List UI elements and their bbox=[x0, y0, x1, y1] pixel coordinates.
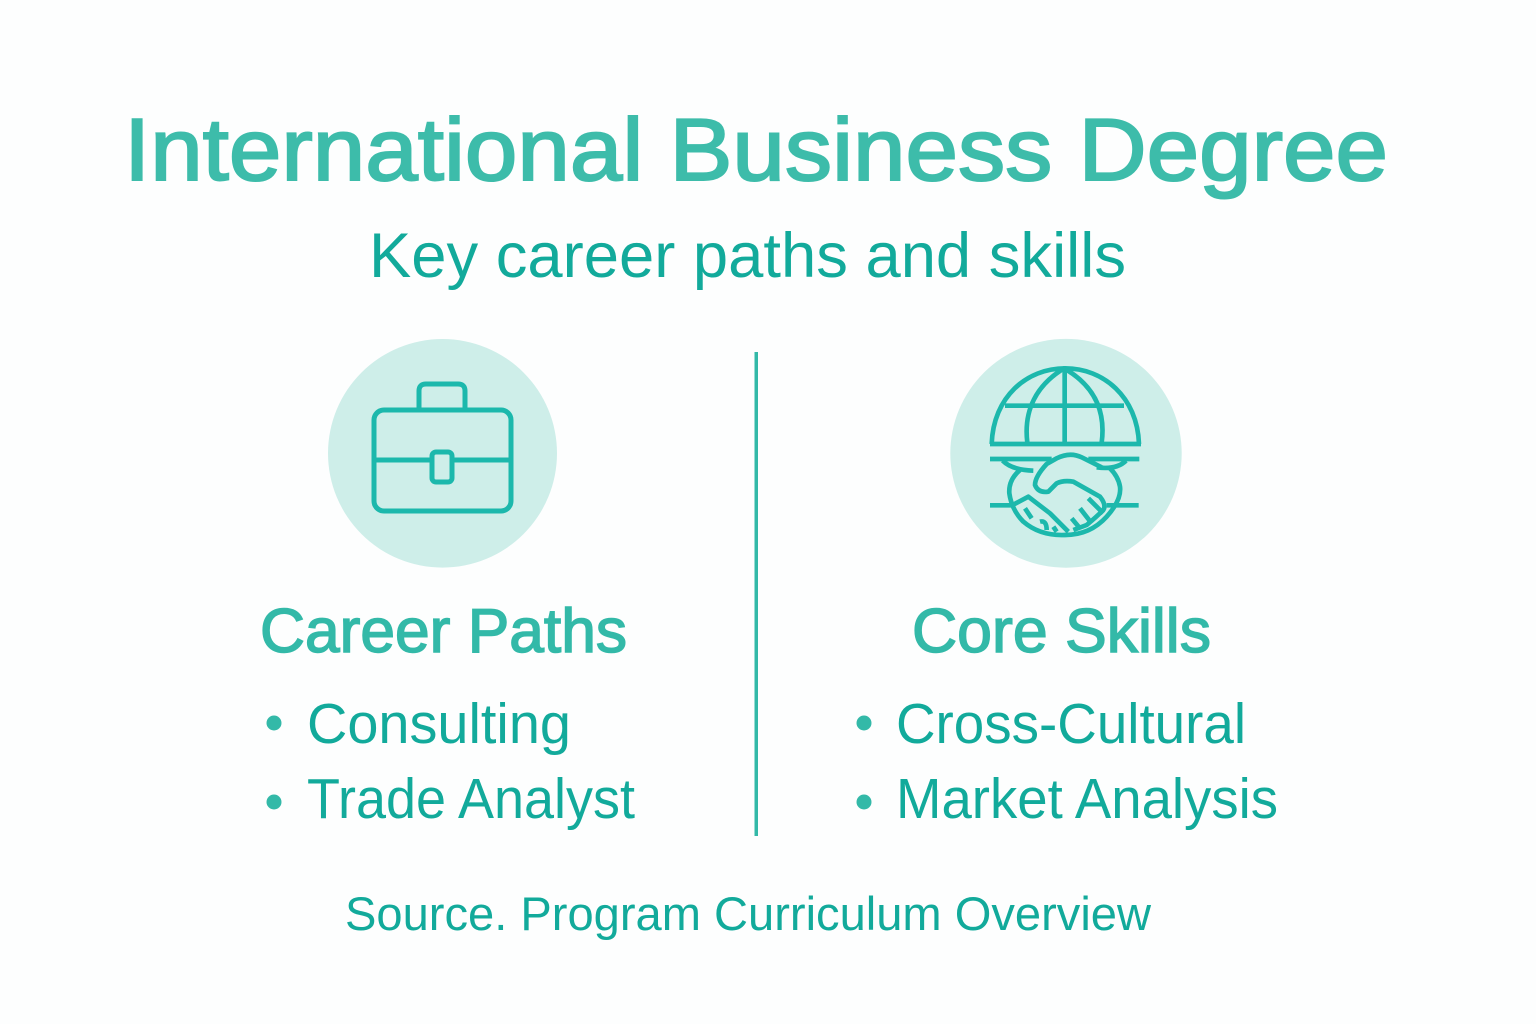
panel: core skills bbox=[856, 339, 1278, 831]
list item: cross-cultural: Cross-Cultural bbox=[896, 692, 1246, 756]
subtitle: Key career paths and skills bbox=[369, 221, 1126, 291]
list item: consulting: Consulting bbox=[307, 692, 571, 756]
source note: Source. Program Curriculum Overview bbox=[345, 887, 1152, 940]
heading: career paths: Career Paths bbox=[260, 597, 627, 666]
heading: core skills: Core Skills bbox=[912, 597, 1211, 666]
icon: briefcase bbox=[328, 339, 557, 568]
list item: trade analyst: Trade Analyst bbox=[307, 767, 635, 831]
list item: market analysis: Market Analysis bbox=[896, 767, 1278, 831]
panel: career paths bbox=[260, 339, 635, 831]
center divider bbox=[754, 352, 758, 836]
icon: globe and handshake bbox=[950, 339, 1182, 568]
title: International Business Degree bbox=[124, 100, 1388, 199]
